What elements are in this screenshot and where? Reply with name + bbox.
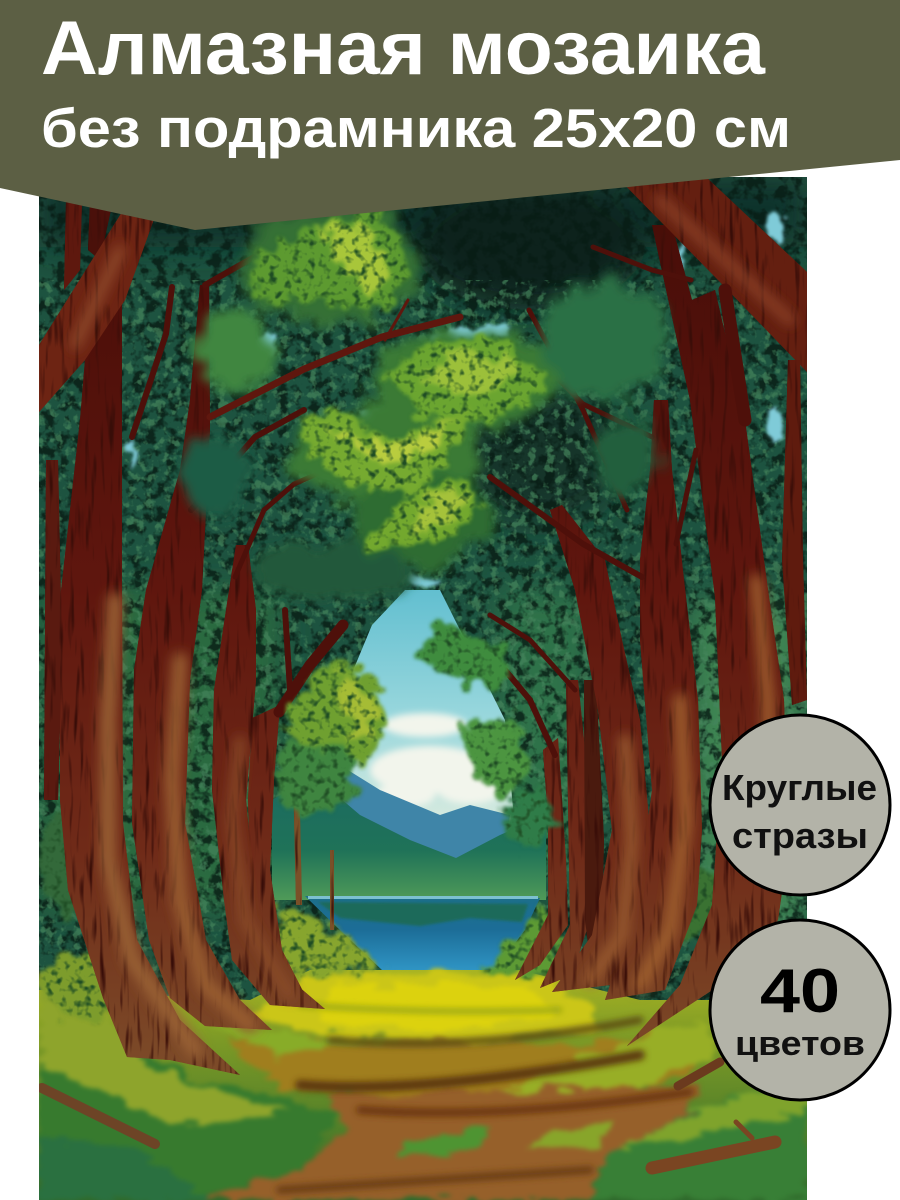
top-right branch xyxy=(617,177,807,372)
shrubs by lake and trunks xyxy=(40,808,722,1017)
grass and sunlit path xyxy=(39,970,807,1200)
trunk 1 xyxy=(60,280,240,1075)
clouds xyxy=(370,713,502,807)
distant left trunks xyxy=(39,177,807,1075)
lake shoreline xyxy=(308,896,538,899)
forest background xyxy=(39,177,807,1000)
heading line two: без подрамника 25х20 см xyxy=(41,97,791,159)
distant right trunks xyxy=(515,400,702,1000)
lake xyxy=(305,896,540,970)
fallen logs xyxy=(42,1062,775,1168)
banner background xyxy=(0,0,900,230)
canopy underlayer xyxy=(181,205,667,600)
ground xyxy=(39,970,807,1200)
trunk 2 xyxy=(132,285,272,1030)
upper sky gaps xyxy=(128,207,783,588)
forested hills xyxy=(272,796,546,900)
badge: round rhinestones: стразы xyxy=(732,815,868,856)
title xyxy=(41,6,791,159)
badge: 40 colours: цветов xyxy=(735,1025,865,1063)
trunk R2 xyxy=(605,400,702,1000)
lake reflection xyxy=(318,902,528,926)
bright branches over canopy xyxy=(210,300,460,417)
badge: 40 colours xyxy=(710,920,890,1100)
sky window xyxy=(340,590,515,830)
trunk R3 xyxy=(550,505,650,992)
badge: 40 colours: 40 xyxy=(760,957,840,1026)
canopy foliage xyxy=(250,207,555,850)
badge: round rhinestones xyxy=(710,715,890,895)
painting: forest path to a lake xyxy=(39,177,807,1200)
dark leaf mottling xyxy=(39,177,807,1017)
log left xyxy=(42,1088,155,1144)
trunk highlights xyxy=(75,200,790,1050)
dark branches xyxy=(132,240,745,755)
heading line one: Алмазная мозаика xyxy=(41,6,766,91)
trunk 3 xyxy=(212,545,325,1009)
far-right trunk xyxy=(782,360,807,705)
path shadows xyxy=(280,1005,690,1190)
background foliage tone xyxy=(39,177,807,930)
main right trunk xyxy=(627,225,788,1046)
top-left branch xyxy=(39,212,154,412)
light leaf mottling xyxy=(39,280,807,1020)
trunk 4 xyxy=(248,707,302,990)
log lower right xyxy=(652,1142,775,1168)
far-left thin trunk xyxy=(44,460,62,800)
badge: round rhinestones: Круглые xyxy=(722,767,877,808)
mountains xyxy=(343,771,510,858)
log by circle xyxy=(678,1062,720,1086)
